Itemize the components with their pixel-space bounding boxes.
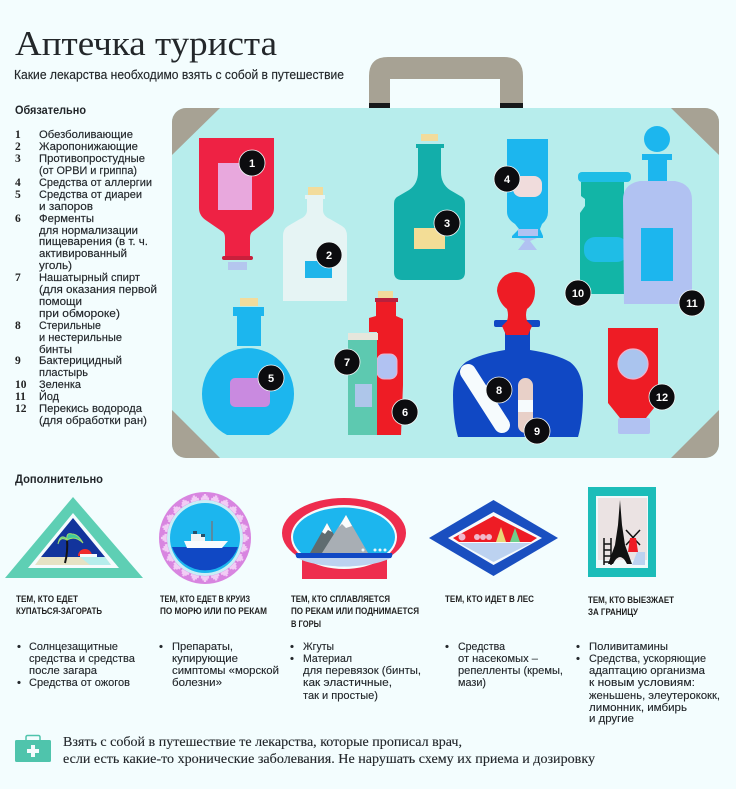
items: swimming <box>17 641 136 689</box>
badge: forest diamond <box>429 500 558 576</box>
required list items: для нормализации <box>39 225 138 237</box>
caption: mountains: В ГОРЫ <box>291 619 321 629</box>
required list items: и нестерильные <box>39 332 122 344</box>
number badges: 8 <box>496 385 502 397</box>
required list numbers: 2 <box>15 141 21 153</box>
number badges: 3 <box>444 218 450 230</box>
items: abroad: • <box>576 653 580 665</box>
required list items: (для обработки ран) <box>39 415 147 427</box>
required list items: Стерильные <box>39 320 101 332</box>
footer note: Взять с собой в путешествие те лекарства, которые прописал врач, <box>63 734 462 749</box>
required list items: Средства от диареи <box>39 189 142 201</box>
caption: abroad: ТЕМ, КТО ВЫЕЗЖАЕТ <box>588 595 674 605</box>
icon: first aid kit <box>15 736 51 762</box>
caption: abroad <box>588 595 674 617</box>
required list numbers: 6 <box>15 213 21 225</box>
caption: mountains <box>291 594 419 629</box>
required list items: Ферменты <box>39 213 94 225</box>
required list numbers <box>15 129 27 415</box>
bottle 5 <box>202 298 294 435</box>
items: cruise: • <box>159 641 163 653</box>
badge: mountain emblem <box>282 498 406 579</box>
panel: suitcase <box>172 108 719 458</box>
required list numbers: 5 <box>15 189 21 201</box>
suitcase handle <box>369 57 523 108</box>
caption: forest: ТЕМ, КТО ИДЕТ В ЛЕС <box>445 594 534 604</box>
caption: swimming <box>16 594 102 616</box>
items: abroad: • <box>576 641 580 653</box>
items: abroad: Средства, ускоряющие <box>589 653 706 665</box>
items: forest <box>445 641 563 689</box>
items: mountains: Жгуты <box>303 641 334 653</box>
required list items: Противопростудные <box>39 153 145 165</box>
items: mountains <box>290 641 421 702</box>
items: abroad: адаптацию организма <box>589 665 706 677</box>
required list items: Бактерицидный <box>39 355 122 367</box>
number badges: 1 <box>249 158 255 170</box>
required list items: уголь) <box>39 260 72 272</box>
required list items: Йод <box>39 390 59 403</box>
required list numbers: 8 <box>15 320 21 332</box>
required list items: Обезболивающие <box>39 129 133 141</box>
required list numbers: 12 <box>15 403 27 415</box>
number badges <box>239 150 705 444</box>
required list numbers: 4 <box>15 177 21 189</box>
heading: additional: Дополнительно <box>15 474 103 486</box>
required list items: Средства от аллергии <box>39 177 152 189</box>
number badges: 7 <box>344 357 350 369</box>
items: mountains: так и простые) <box>303 690 378 702</box>
items: cruise <box>159 641 279 689</box>
required list items: при обмороке) <box>39 308 120 320</box>
number badges: 4 <box>504 174 511 186</box>
items: abroad: женьшень, элеутерококк, <box>589 690 720 702</box>
items: abroad: Поливитамины <box>589 641 668 653</box>
items: swimming: средства и средства <box>29 653 136 665</box>
caption: mountains: ПО РЕКАМ ИЛИ ПОДНИМАЕТСЯ <box>291 606 419 616</box>
required list items: пластырь <box>39 367 88 379</box>
items: forest: репелленты (кремы, <box>458 665 563 677</box>
caption: cruise: ТЕМ, КТО ЕДЕТ В КРУИЗ <box>160 594 250 604</box>
required list items: Перекись водорода <box>39 403 143 415</box>
number badges: 2 <box>326 250 332 262</box>
required list items: (для оказания первой <box>39 284 157 296</box>
footer note: если есть какие-то хронические заболевания. Не нарушать схему их приема и дозировку <box>63 751 595 766</box>
bottle 10 <box>578 172 631 294</box>
required list items: активированный <box>39 248 127 260</box>
number badges: 10 <box>572 288 584 300</box>
items: forest: от насекомых – <box>458 653 539 665</box>
badge: abroad stamp <box>588 487 656 577</box>
required list items: и запоров <box>39 201 93 213</box>
bottle 2 <box>283 187 347 301</box>
bottle 4 <box>507 139 548 250</box>
number badges: 11 <box>686 298 698 310</box>
bottle 8 and 9 <box>453 272 583 437</box>
items: swimming: после загара <box>29 665 98 677</box>
items: swimming: • <box>17 677 21 689</box>
items: abroad <box>576 641 720 725</box>
items: forest: мази) <box>458 677 486 689</box>
bottle 12 <box>608 328 658 434</box>
bottle 3 <box>394 134 465 280</box>
items: forest: Средства <box>458 641 506 653</box>
number badges: 6 <box>402 407 408 419</box>
items: abroad: к новым условиям: <box>589 677 695 689</box>
required list numbers: 1 <box>15 129 21 141</box>
items: mountains: как эластичные, <box>303 677 392 689</box>
caption: swimming: КУПАТЬСЯ-ЗАГОРАТЬ <box>16 606 102 616</box>
items: swimming: Средства от ожогов <box>29 677 130 689</box>
caption: abroad: ЗА ГРАНИЦУ <box>588 607 638 617</box>
title: Аптечка туриста <box>15 24 277 63</box>
items: mountains: для перевязок (бинты, <box>303 665 421 677</box>
bottle 6 <box>369 291 403 435</box>
caption: cruise: ПО МОРЮ ИЛИ ПО РЕКАМ <box>160 606 267 616</box>
caption: mountains: ТЕМ, КТО СПЛАВЛЯЕТСЯ <box>291 594 390 604</box>
required list items: пищеварения (в т. ч. <box>39 236 148 248</box>
required list items: Нашатырный спирт <box>39 272 141 284</box>
items: cruise: Препараты, <box>172 641 233 653</box>
items: mountains: • <box>290 653 294 665</box>
items: mountains: • <box>290 641 294 653</box>
items: swimming: Солнцезащитные <box>29 641 118 653</box>
required list items: Жаропонижающие <box>39 141 138 153</box>
items: cruise: болезни» <box>172 677 222 689</box>
required list numbers: 10 <box>15 379 27 391</box>
items: swimming: • <box>17 641 21 653</box>
required list items <box>39 129 157 427</box>
required list items: помощи <box>39 296 82 308</box>
number badges: 9 <box>534 426 540 438</box>
footer note <box>63 734 595 766</box>
items: mountains: Материал <box>303 653 352 665</box>
required list items: Зеленка <box>39 379 82 391</box>
subtitle: Какие лекарства необходимо взять с собой в путешествие <box>14 67 344 82</box>
items: forest: • <box>445 641 449 653</box>
required list items: (от ОРВИ и гриппа) <box>39 165 137 177</box>
required list numbers: 11 <box>15 391 26 403</box>
items: abroad: и другие <box>589 713 634 725</box>
items: cruise: симптомы «морской <box>172 665 279 677</box>
badge: beach triangle <box>5 497 143 578</box>
required list numbers: 3 <box>15 153 21 165</box>
heading: required: Обязательно <box>15 105 86 117</box>
badge: cruise circle <box>159 492 251 584</box>
number badges: 5 <box>268 373 274 385</box>
required list items: бинты <box>39 344 72 356</box>
items: abroad: лимонник, имбирь <box>589 702 687 714</box>
bottle 11 <box>623 126 692 304</box>
caption: swimming: ТЕМ, КТО ЕДЕТ <box>16 594 78 604</box>
required list numbers: 9 <box>15 355 21 367</box>
number badges: 12 <box>656 392 668 404</box>
required list numbers: 7 <box>15 272 21 284</box>
items: cruise: купирующие <box>172 653 238 665</box>
bottle 1 <box>199 138 274 270</box>
bottle 7 <box>348 333 378 435</box>
caption: cruise <box>160 594 267 616</box>
